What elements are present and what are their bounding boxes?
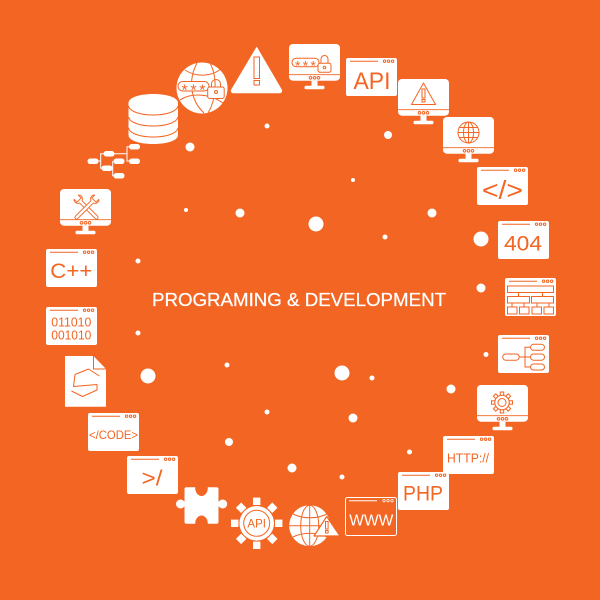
icon: HTTP window: HTTP://	[447, 451, 489, 466]
icon: blocks window	[505, 278, 556, 316]
icon: monitor with gear	[477, 385, 528, 430]
icon: binary window: 011010	[51, 314, 91, 329]
icon: monitor with globe	[443, 117, 494, 162]
icon: warning triangle	[231, 48, 282, 93]
icon: monitor with password	[289, 44, 340, 89]
icon: monitor with password: ***	[295, 57, 317, 73]
icon: code label window	[88, 413, 139, 451]
icon: code tag window: </>	[482, 175, 523, 205]
icon: flow chart window	[498, 335, 549, 373]
icon: 404 window: 404	[504, 232, 542, 256]
icon: code tag window	[477, 167, 528, 205]
icon: org chart	[88, 144, 140, 178]
icon: database	[128, 94, 178, 144]
icon: C++ window: C++	[50, 260, 92, 283]
title: PROGRAMING & DEVELOPMENT	[152, 290, 446, 310]
icon: binary window: 001010	[51, 328, 91, 343]
icon: monitor with warning	[398, 79, 449, 124]
icon: globe with password	[176, 62, 228, 114]
icon: terminal prompt window: >/	[142, 466, 163, 490]
icon: code label window: </CODE>	[89, 428, 138, 442]
icon: PHP window: PHP	[403, 483, 443, 506]
icon: API window: API	[354, 68, 390, 95]
icon: terminal prompt window	[127, 456, 178, 494]
icon: WWW outlined window	[346, 498, 396, 536]
icon: WWW outlined window: WWW	[349, 512, 394, 529]
icon: binary window	[46, 307, 97, 345]
icon: API gear: API	[247, 518, 266, 530]
icon: puzzle piece	[176, 480, 227, 532]
icon: monitor with tools	[60, 189, 111, 234]
decorative dots	[136, 124, 488, 480]
icon: API window	[346, 58, 397, 96]
icon: globe with warning	[289, 505, 340, 546]
icon: HTTP window	[443, 436, 494, 474]
icon: 404 window	[498, 221, 549, 259]
icon: API gear	[231, 498, 282, 549]
icon: globe with password: ***	[182, 82, 206, 100]
icon: C++ window	[46, 249, 97, 287]
icon: PHP window	[398, 472, 449, 510]
icon: document with S	[65, 356, 106, 407]
